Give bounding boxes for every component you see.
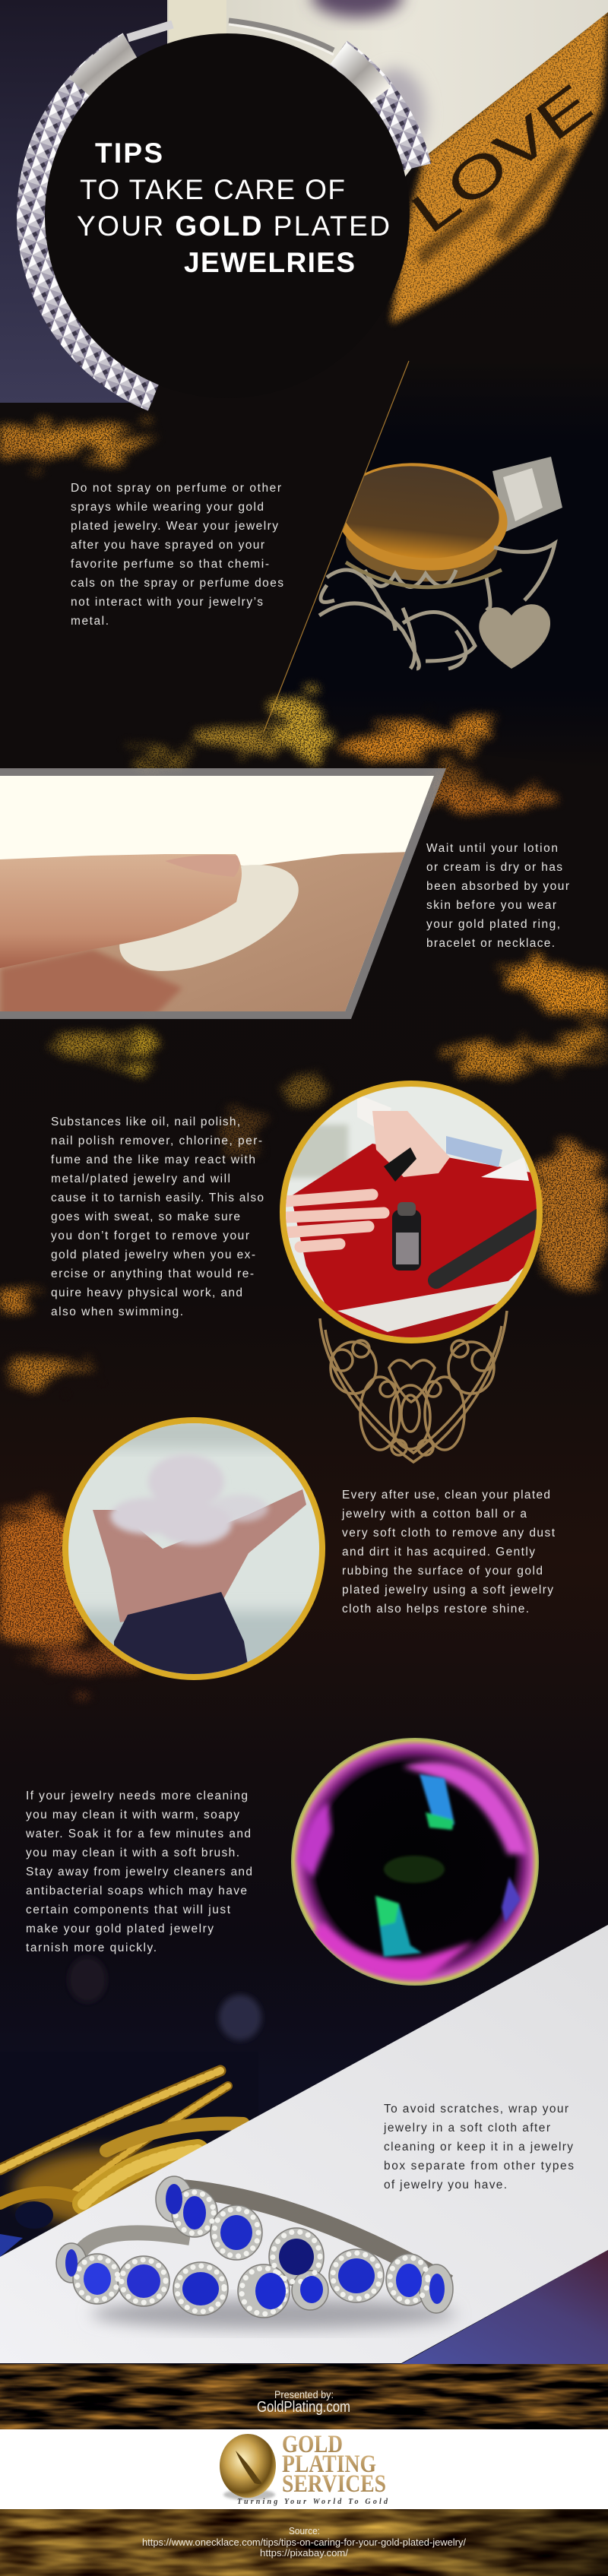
tip text: substances: fume and the like may react with [51,1154,255,1166]
tip text: lotion: your gold plated ring, [426,918,560,931]
tip text: substances: cause it to tarnish easily. This also [51,1191,264,1204]
title: JEWELRIES [184,247,355,278]
dark streaks in the sand [418,144,572,266]
photo: perfume bottle with jewelry [277,424,608,711]
tip text: substances: Substances like oil, nail polish, [51,1116,240,1128]
logo: wordmark: SERVICES [282,2470,386,2498]
tip text: storage: of jewelry you have. [384,2179,507,2191]
tip text: storage: jewelry in a soft cloth after [383,2122,550,2135]
tip text: perfume: plated jewelry. Wear your jewelry [71,520,278,533]
tip text: lotion: been absorbed by your [426,880,569,893]
tip text: substances: gold plated jewelry when you ex- [51,1248,255,1261]
footer band: sources: Source: [289,2525,320,2536]
tip text: cotton cleaning: plated jewelry using a soft jewelry [342,1584,553,1597]
footer band: presented by [0,2364,608,2429]
tip text: cotton cleaning: Every after use, clean your plated [342,1489,550,1502]
logo: wordmark: GOLD [282,2431,343,2458]
blue box [446,1136,502,1167]
tip text: perfume: Do not spray on perfume or other [71,482,281,495]
logo: gold globe [220,2434,276,2500]
title: TIPS [95,138,163,169]
sapphire gems [65,2184,445,2309]
cotton cloud [110,1454,268,1545]
footer band: sources: https://pixabay.com/ [260,2547,348,2559]
photo: earring backdrop [0,0,608,403]
title [77,138,390,278]
black title circle [45,33,410,398]
tip text: soapy water [25,1790,252,1954]
faint bubble orbs [68,1957,261,2040]
heart pendant [479,604,550,669]
lotion scene [0,776,441,1019]
photo: gold bracelets [0,2052,258,2272]
tip text: substances: you don’t forget to remove your [51,1229,249,1242]
upper hand [357,1094,450,1182]
circle photo: cotton in palm [62,1417,325,1683]
tip text: soapy water: water. Soak it for a few minutes and [25,1828,251,1840]
small set diamonds [77,2192,428,2314]
tip text: soapy water: you may clean it with warm, soapy [26,1809,239,1821]
tip text: substances: goes with sweat, so make sure [51,1210,240,1223]
cream blob [119,865,299,971]
tip text: storage [383,2103,574,2191]
title: YOUR GOLD PLATED [77,210,390,242]
logo: tagline: Turning Your World To Gold [237,2498,388,2506]
fingernail [165,855,239,877]
tip text: perfume: favorite perfume so that chemi- [71,558,269,571]
word: LOVE written in sand: LOVE [400,71,603,245]
gold dust clusters [0,423,608,1676]
footer band: sources: https://www.onecklace.com/tips/tips-on-caring-for-your-gold-plated-jewelry/ [142,2536,466,2548]
tip text: substances: nail polish remover, chlorine, per- [51,1135,262,1147]
title: TO TAKE CARE OF [80,174,345,205]
logo: wordmark: PLATING [282,2451,376,2478]
ribbons and chain [319,543,555,669]
tip text: substances [51,1116,264,1318]
tip text: soapy water: Stay away from jewelry cleaners and [26,1866,252,1878]
tip text: perfume: after you have sprayed on your [71,539,264,552]
tip text: soapy water: you may clean it with a soft brush. [26,1847,239,1859]
tip text: cotton cleaning: rubbing the surface of your gold [342,1565,543,1578]
tip text: soapy water: antibacterial soaps which may have [26,1885,247,1897]
tip text: soapy water: certain components that will just [26,1904,231,1916]
soap bubble [291,1738,539,1986]
tip text: substances: quire heavy physical work, and [51,1286,242,1299]
tip text: cotton cleaning: cloth also helps restore shine. [342,1603,529,1616]
bottle cap [492,457,562,532]
sleeve [114,1592,251,1683]
tip text: storage: To avoid scratches, wrap your [384,2103,568,2116]
tip text: lotion: Wait until your lotion [426,842,558,855]
tip text: lotion: or cream is dry or has [426,861,562,874]
footer band: sources [0,2509,608,2576]
gold sand with LOVE word [391,8,608,323]
logo band [0,2429,608,2509]
tip text: lotion: skin before you wear [426,899,556,912]
tip text: perfume: cals on the spray or perfume does [71,577,283,590]
tip text: soapy water: If your jewelry needs more cleaning [26,1790,248,1802]
tip text: storage: box separate from other types [384,2160,574,2173]
gem settings [56,2176,453,2318]
logo: wordmark [282,2431,386,2498]
photo: lotion on skin [0,768,446,1019]
tip text: cotton cleaning [341,1489,556,1616]
footer band: presented by: GoldPlating.com [257,2399,350,2416]
filigree gold heart [320,1311,507,1462]
bottle glass [342,463,508,582]
blue blurred corner [401,2250,608,2364]
footer band: presented by: Presented by: [274,2388,334,2400]
finger [0,854,242,968]
lower hand fingers [285,1195,384,1247]
tip text: cotton cleaning: jewelry with a cotton ball or a [341,1508,527,1521]
photo: sapphire bracelets [56,2176,456,2329]
icon: silver hoop earring [31,21,416,397]
tip text: perfume: sprays while wearing your gold [71,501,264,514]
hand [93,1489,306,1622]
reflections: blue and green [375,1774,521,1957]
white diagonal panel [0,1925,608,2363]
tip text: substances: metal/plated jewelry and will [51,1172,230,1185]
tip text: lotion: bracelet or necklace. [426,937,555,950]
tip text: soapy water: tarnish more quickly. [26,1941,157,1954]
tip text: perfume: not interact with your jewelry’s [71,596,263,609]
tip text: substances: ercise or anything that would re- [51,1267,254,1280]
polish bottle [392,1202,421,1271]
tip text: cotton cleaning: very soft cloth to remove any dust [342,1527,556,1540]
tip text: perfume: metal. [71,615,109,628]
pen [436,1216,541,1280]
tip text: storage: cleaning or keep it in a jewelry [384,2141,573,2154]
tip text: soapy water: make your gold plated jewelry [26,1923,214,1935]
tip text: perfume [71,482,283,628]
thin gold divider line [264,361,409,732]
tip text: lotion [426,842,569,950]
tip text: substances: also when swimming. [51,1305,183,1318]
tip text: cotton cleaning: and dirt it has acquired. Gently [342,1546,535,1559]
circle photo: nail polish [280,1081,543,1345]
white paper [481,1157,529,1181]
